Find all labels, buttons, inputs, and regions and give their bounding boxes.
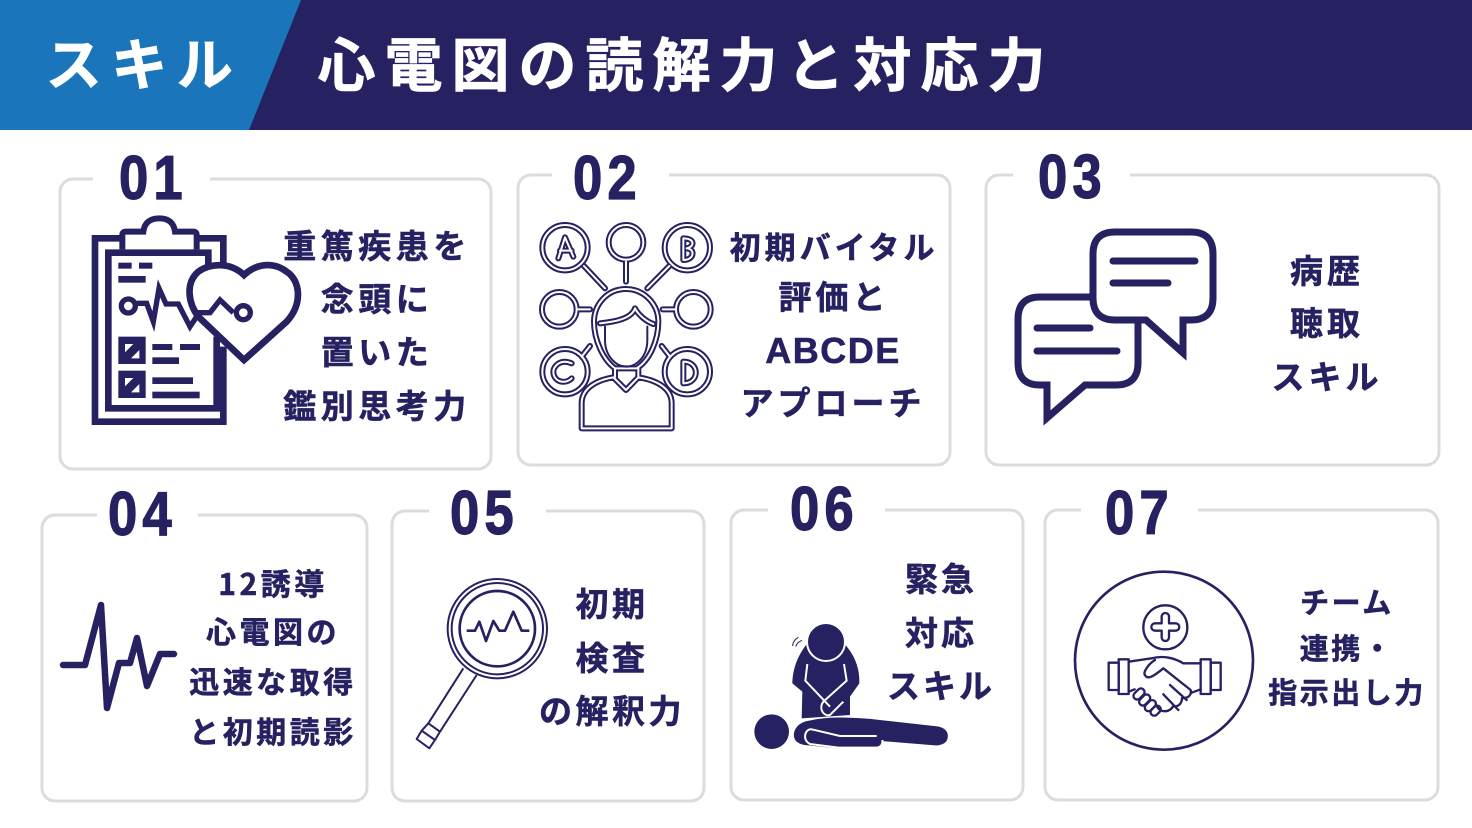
icon: CPR	[754, 623, 948, 749]
text block 02: アプローチ	[740, 377, 926, 425]
text block 04	[189, 560, 357, 752]
icon: speech bubbles	[1018, 232, 1213, 418]
text block 06	[887, 553, 995, 708]
text block 04: 心電図の	[206, 608, 340, 652]
text block 03: スキル	[1272, 351, 1382, 399]
title: 心電図の読解力と対応力	[317, 19, 1055, 103]
text block 06: 緊急	[905, 553, 977, 601]
header tab: skill: スキル	[46, 21, 242, 102]
text block 01: 重篤疾患を	[283, 220, 471, 268]
number 02: 02	[573, 144, 642, 213]
text block 04: 迅速な取得	[189, 658, 357, 702]
text block 05	[539, 578, 685, 733]
text block 04: と初期読影	[189, 708, 357, 752]
panel 04: 12-lead ECG	[42, 480, 367, 801]
text block 01: 置いた	[321, 326, 433, 374]
panel 05: initial test interpretation	[392, 479, 704, 801]
text block 06: スキル	[887, 660, 995, 708]
number 05: 05	[450, 479, 519, 548]
text block 01: 念頭に	[321, 273, 433, 321]
text block 01	[283, 220, 471, 428]
icon: handshake with medical cross	[1075, 572, 1253, 750]
text block 02: 評価と	[778, 271, 890, 319]
panel 07: team coordination	[1045, 479, 1438, 800]
text block 03: 聴取	[1290, 297, 1364, 345]
text block 05: 初期	[576, 578, 648, 626]
text block 05: の解釈力	[539, 685, 685, 733]
text block 07	[1268, 580, 1426, 712]
text block 05: 検査	[576, 632, 648, 680]
text block 01: 鑑別思考力	[283, 380, 471, 428]
number 03: 03	[1038, 143, 1107, 212]
text block 03: 病歴	[1290, 245, 1364, 293]
text block 07: 指示出し力	[1268, 670, 1426, 712]
text block 04: 12誘導	[218, 560, 328, 604]
number 07: 07	[1105, 479, 1174, 548]
number 06: 06	[790, 475, 859, 544]
panel 03: history taking	[986, 143, 1439, 465]
text block 07: チーム	[1300, 580, 1394, 622]
header tab: skill	[0, 0, 301, 130]
icon: person with ABCD bubbles	[542, 225, 711, 428]
text block 07: 連携・	[1300, 626, 1394, 668]
text block 06: 対応	[905, 607, 977, 655]
text block 02	[730, 223, 938, 425]
icon: clipboard with heart	[95, 218, 298, 422]
header band	[0, 0, 1472, 130]
icon: ECG waveform	[63, 605, 174, 708]
panel 01: critical disease	[60, 144, 491, 469]
icon: magnifying glass with ECG	[417, 581, 545, 748]
panel 02: initial vitals	[518, 144, 950, 465]
text block 02: ABCDE	[765, 330, 901, 371]
number 04: 04	[108, 480, 177, 549]
panel 06: emergency response	[731, 475, 1023, 800]
number 01: 01	[119, 144, 188, 213]
text block 02: 初期バイタル	[730, 223, 938, 268]
text block 03	[1272, 245, 1382, 399]
